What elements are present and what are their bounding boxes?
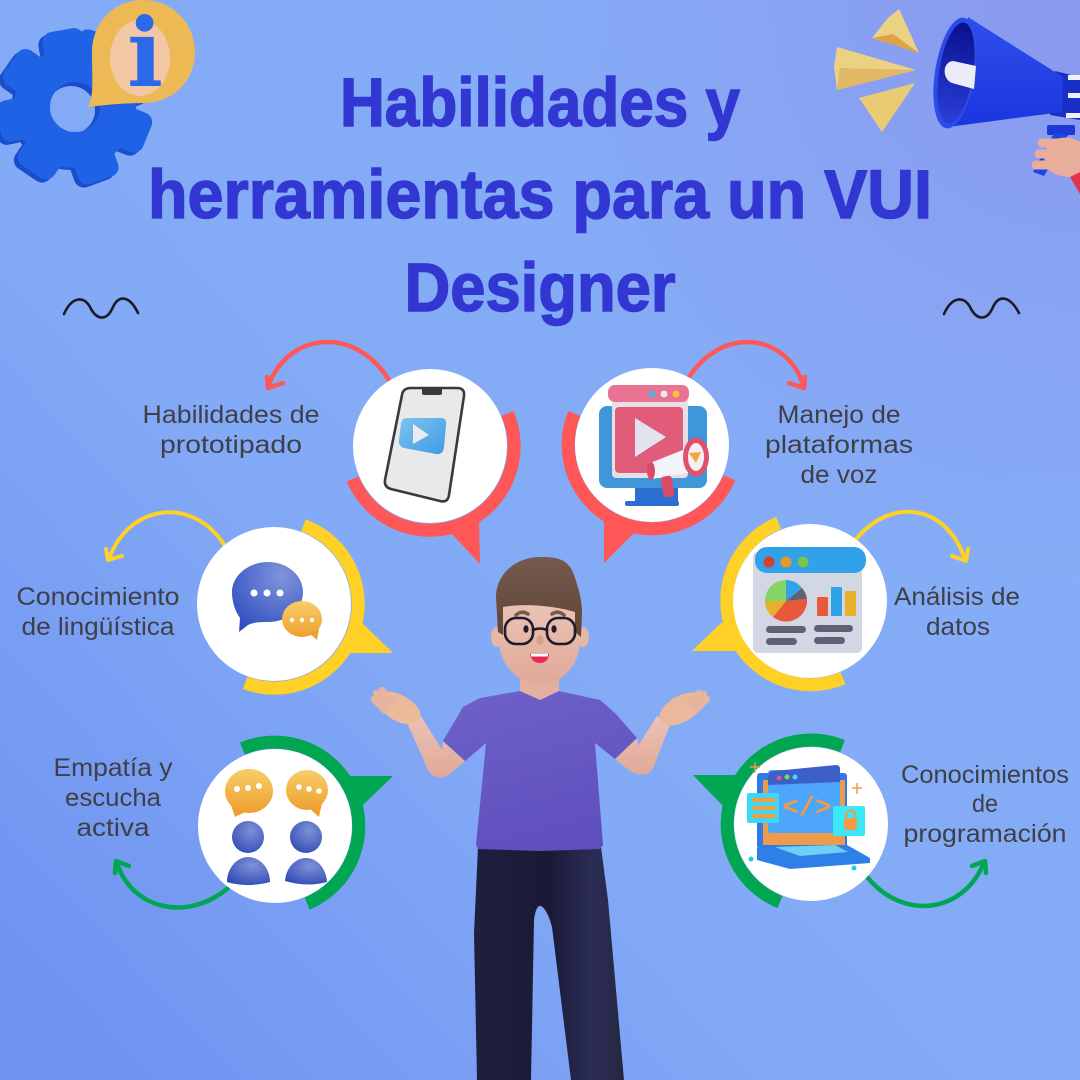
label: Análisis de bbox=[894, 583, 1020, 611]
bar chart bbox=[817, 587, 856, 616]
icon: info speech bubble bbox=[88, 0, 195, 109]
label: de voz bbox=[800, 461, 878, 489]
panel: linguistics bbox=[16, 512, 393, 688]
icon: hand bbox=[1036, 138, 1080, 194]
icon: blue gear with info bubble bbox=[0, 0, 195, 190]
arrow: red right bbox=[686, 342, 805, 388]
trousers bbox=[474, 847, 624, 1080]
panel: prototyping skill bbox=[142, 342, 514, 564]
label bbox=[142, 401, 320, 459]
title bbox=[148, 64, 932, 326]
icon: megaphone with hand bbox=[834, 9, 1080, 194]
t-shirt bbox=[443, 691, 637, 851]
panel: voice platforms bbox=[568, 342, 913, 563]
left arm and hand bbox=[372, 685, 465, 777]
label: Conocimientos bbox=[901, 761, 1069, 789]
icon: phone with play button bbox=[385, 388, 464, 501]
hair bbox=[496, 557, 582, 637]
mouth bbox=[530, 654, 549, 663]
ears bbox=[491, 627, 589, 647]
label: escucha bbox=[65, 784, 161, 812]
squiggle left bbox=[64, 299, 138, 318]
arrow: red left bbox=[267, 342, 390, 388]
speech ring: yellow right bbox=[692, 523, 887, 685]
arrow: yellow left bbox=[106, 512, 225, 560]
pie chart bbox=[765, 580, 807, 622]
label bbox=[901, 761, 1069, 848]
label: Empatía y bbox=[54, 754, 173, 782]
panel: data analysis bbox=[692, 512, 1020, 685]
label: de lingüística bbox=[22, 613, 175, 641]
title: Habilidades y bbox=[340, 64, 740, 141]
label: Habilidades de bbox=[142, 401, 320, 429]
icon: people talking bbox=[225, 769, 328, 885]
speech ring: yellow left bbox=[197, 525, 393, 688]
eyebrows bbox=[516, 612, 564, 615]
speech ring: green left bbox=[198, 742, 393, 904]
glasses bbox=[505, 618, 575, 644]
icon: analytics dashboard bbox=[753, 547, 866, 653]
label: Manejo de bbox=[778, 401, 900, 429]
icon: megaphone body bbox=[926, 15, 1080, 176]
neck bbox=[520, 675, 559, 703]
title: Designer bbox=[404, 249, 676, 326]
squiggle right bbox=[944, 299, 1019, 318]
icon: gold shards bbox=[834, 9, 919, 132]
icon: laptop with code bbox=[747, 762, 870, 870]
title: herramientas para un VUI bbox=[148, 156, 932, 233]
label bbox=[54, 754, 173, 842]
label bbox=[894, 583, 1020, 641]
label bbox=[765, 401, 913, 489]
label: de bbox=[972, 790, 998, 818]
label: prototipado bbox=[160, 431, 302, 459]
arrow: yellow right bbox=[853, 512, 968, 561]
face bbox=[499, 600, 580, 684]
right arm and hand bbox=[615, 686, 708, 775]
icon: info speech bubble: i bbox=[127, 0, 163, 109]
icon: monitor with video and megaphone bbox=[599, 385, 709, 506]
arrow: green right bbox=[868, 861, 986, 906]
nose bbox=[536, 635, 544, 645]
label: activa bbox=[76, 814, 150, 842]
label: datos bbox=[926, 613, 990, 641]
panel: empathy bbox=[54, 742, 393, 907]
label: plataformas bbox=[765, 431, 913, 459]
speech ring: red right bbox=[568, 368, 729, 563]
icon: gear bbox=[0, 27, 155, 190]
speech ring: green right bbox=[693, 740, 888, 902]
character: man with glasses bbox=[372, 557, 708, 1080]
panel: programming bbox=[693, 740, 1069, 906]
label: Conocimiento bbox=[16, 583, 180, 611]
eyes bbox=[523, 625, 557, 633]
arrow: green left bbox=[115, 861, 228, 907]
icon: laptop with code: </> bbox=[783, 794, 831, 824]
label: programación bbox=[904, 820, 1066, 848]
label bbox=[16, 583, 180, 641]
speech ring: red left bbox=[353, 369, 514, 564]
icon: chat bubbles bbox=[232, 562, 322, 640]
